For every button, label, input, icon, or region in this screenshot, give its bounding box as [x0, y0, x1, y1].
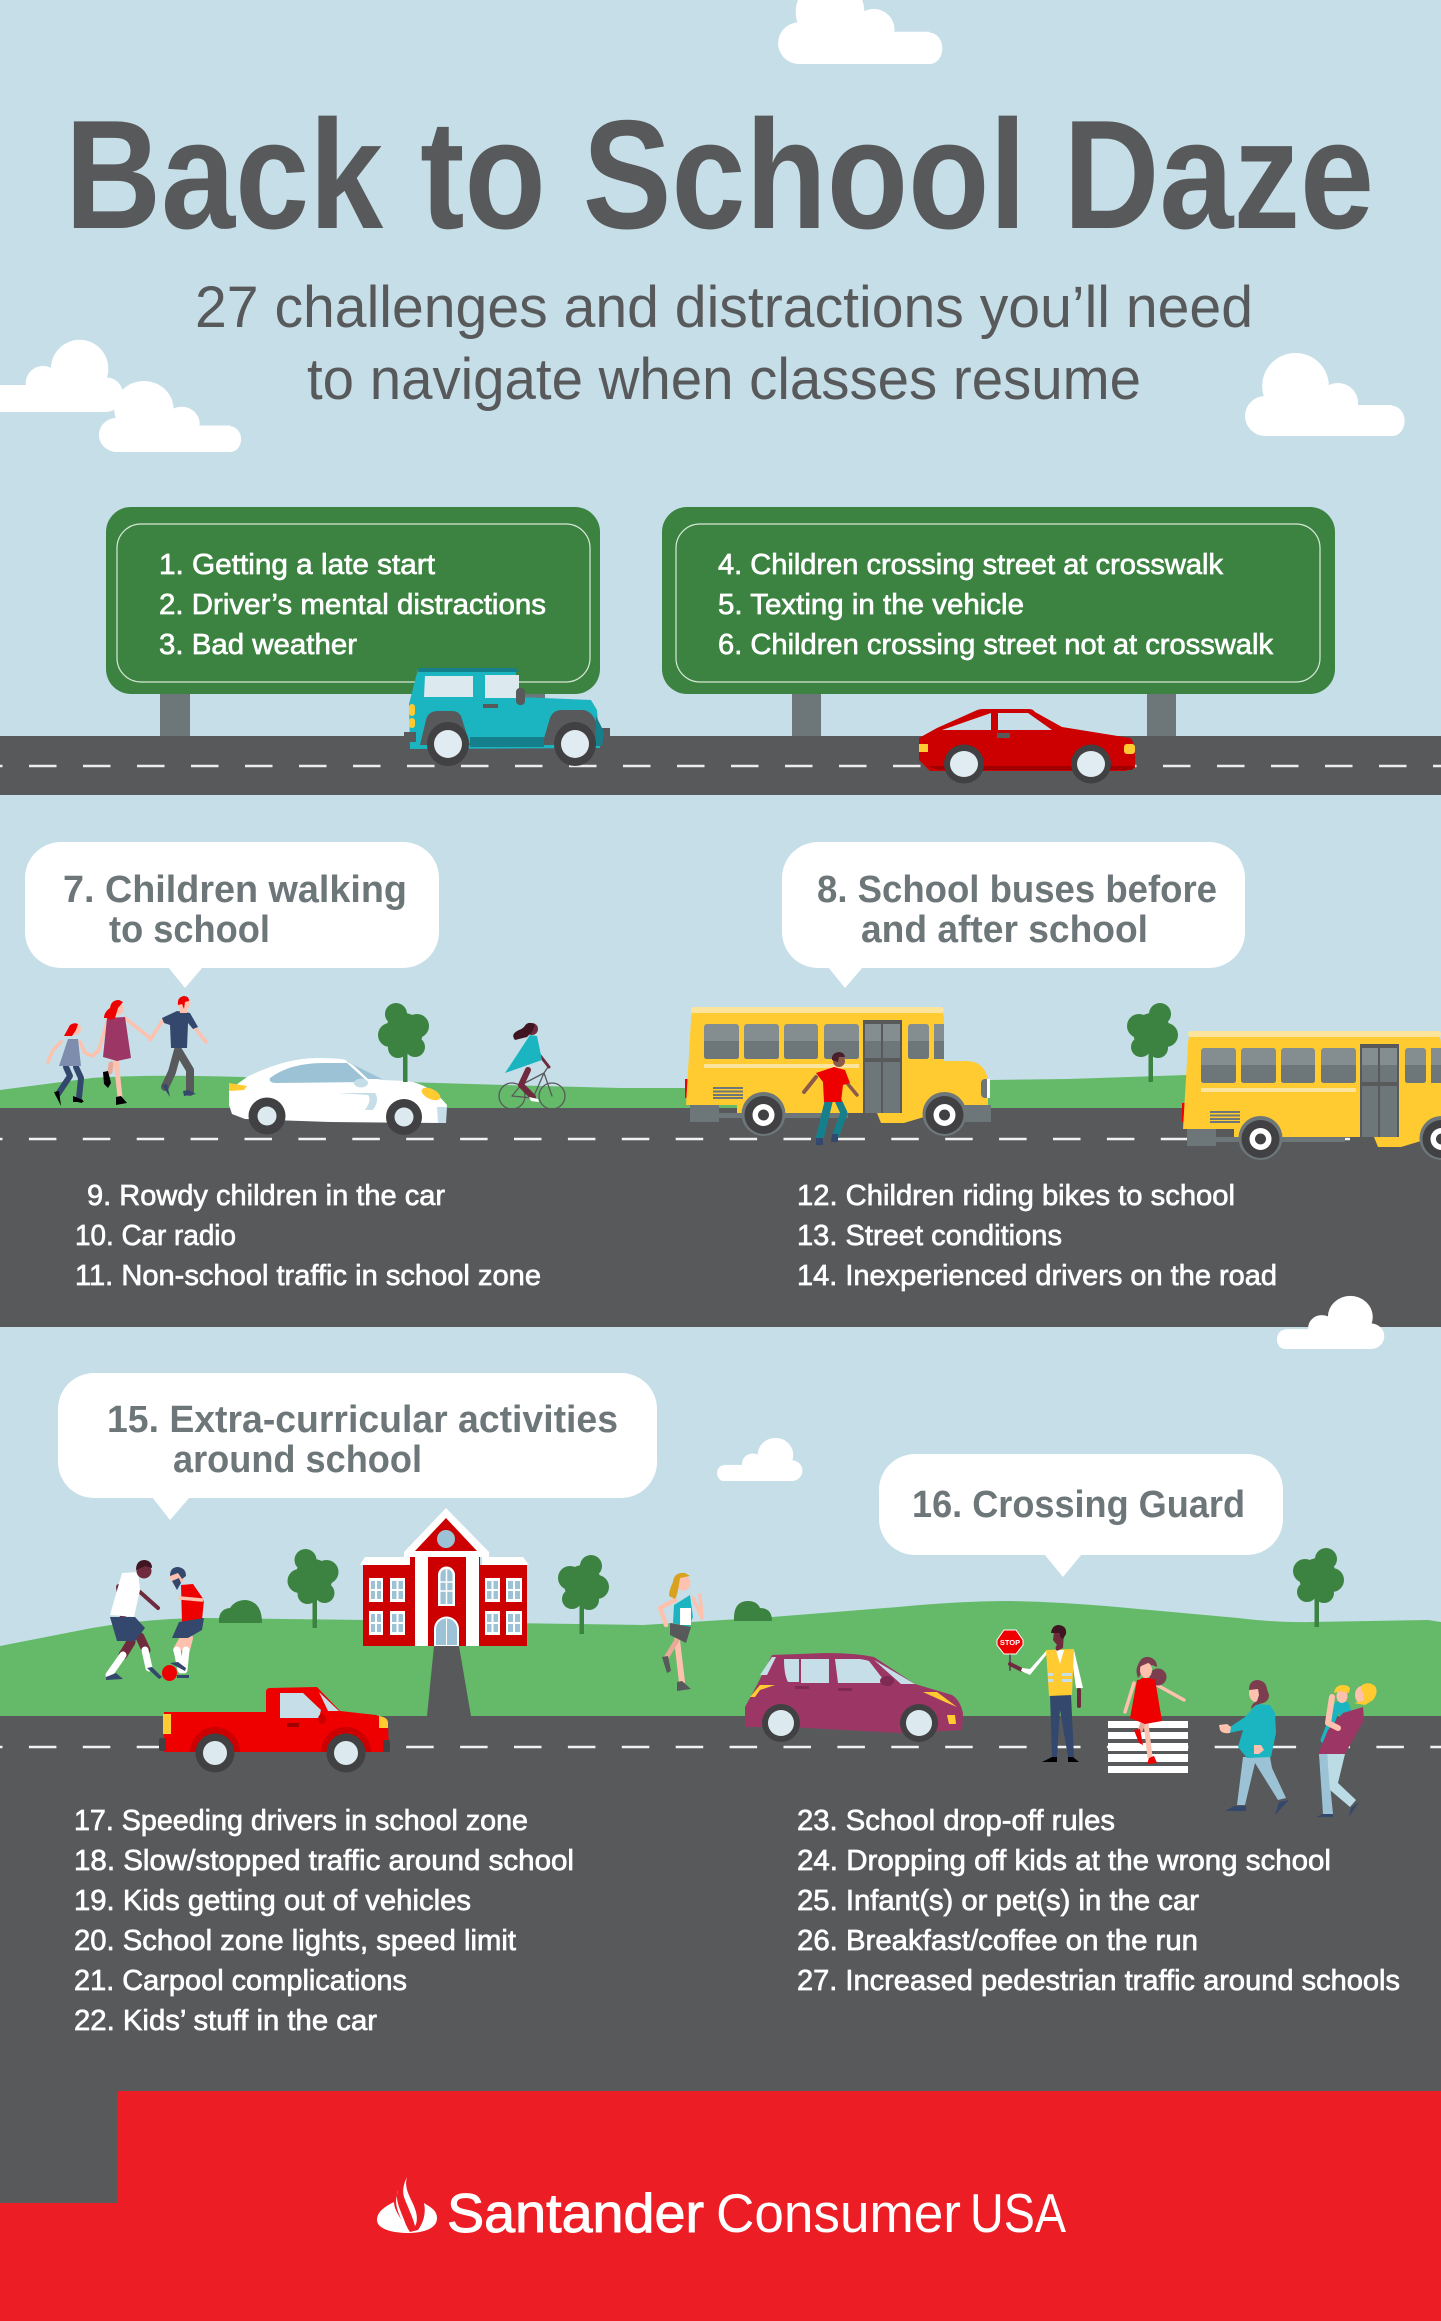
list: items 12-14: 14. Inexperienced drivers on the road	[797, 1260, 1277, 1292]
subtitle: 27 challenges and distractions you’ll need	[195, 275, 1253, 340]
list: items 23-27: 26. Breakfast/coffee on the run	[797, 1925, 1198, 1957]
sign 2 list	[718, 549, 1273, 661]
cloud: small centre	[717, 1438, 802, 1481]
soccer ball	[162, 1665, 177, 1681]
sign 1 list: 3. Bad weather	[159, 629, 357, 661]
tree	[558, 1555, 609, 1634]
panel: highway sign 2	[662, 507, 1335, 736]
speech bubble: item 8: and after school	[861, 909, 1148, 951]
school windows	[369, 1566, 522, 1635]
list: items 9-11: 9. Rowdy children in the car	[87, 1180, 445, 1212]
list: items 17-22: 21. Carpool complications	[74, 1965, 407, 1997]
grass hill: middle section	[0, 1075, 1441, 1108]
vehicle: red coupe	[919, 709, 1135, 784]
list: items 9-11: 10. Car radio	[75, 1220, 236, 1252]
speech bubble: item 7: to school	[109, 909, 270, 951]
person: girl on bicycle	[499, 1023, 565, 1109]
man	[150, 996, 206, 1097]
people: soccer players	[106, 1560, 204, 1681]
logo: Santander Consumer USA	[377, 2177, 1066, 2244]
cloud: mid right	[1277, 1296, 1384, 1349]
footer band	[0, 2091, 1441, 2321]
logo: Santander Consumer USA: Consumer	[716, 2182, 961, 2244]
list: items 23-27: 23. School drop-off rules	[797, 1805, 1115, 1837]
sign 1 list: 2. Driver’s mental distractions	[159, 589, 546, 621]
cloud: left upper	[0, 340, 123, 412]
child	[48, 1023, 100, 1106]
sign 1 list	[159, 549, 546, 661]
subtitle	[195, 275, 1253, 412]
list: items 23-27: 24. Dropping off kids at the wrong school	[797, 1845, 1331, 1877]
speech bubble: item 7	[25, 842, 439, 988]
person: man carrying child	[1316, 1683, 1377, 1817]
subtitle: to navigate when classes resume	[307, 347, 1141, 412]
list: items 9-11	[75, 1180, 541, 1292]
woman	[98, 1000, 150, 1105]
list: items 23-27	[797, 1805, 1400, 1997]
vehicle: red pickup truck	[159, 1687, 390, 1772]
speech bubble: item 8: 8. School buses before	[817, 869, 1217, 911]
list: items 17-22	[74, 1805, 574, 2037]
sign 1 list: 1. Getting a late start	[159, 549, 435, 581]
person: girl in red dress	[1125, 1657, 1184, 1764]
cloud: left lower	[99, 381, 241, 452]
list: items 9-11: 11. Non-school traffic in school zone	[75, 1260, 541, 1292]
road: top section	[0, 736, 1441, 795]
logo: Santander Consumer USA: Santander	[447, 2182, 704, 2244]
logo: Santander Consumer USA: USA	[970, 2182, 1066, 2244]
list: items 17-22: 22. Kids’ stuff in the car	[74, 2005, 377, 2037]
cloud: right	[1245, 353, 1405, 436]
bush	[734, 1601, 772, 1621]
list: items 17-22: 18. Slow/stopped traffic around school	[74, 1845, 574, 1877]
sign 2 list: 5. Texting in the vehicle	[718, 589, 1024, 621]
school driveway	[427, 1646, 471, 1716]
speech bubble: item 7: 7. Children walking	[63, 869, 407, 911]
vehicle: purple hatchback	[745, 1653, 963, 1742]
panel: highway sign 1	[106, 507, 600, 736]
list: items 17-22: 20. School zone lights, speed limit	[74, 1925, 516, 1957]
vehicle: school bus 2	[1182, 1031, 1441, 1160]
vehicle: teal jeep	[404, 668, 610, 766]
list: items 12-14: 12. Children riding bikes to school	[797, 1180, 1235, 1212]
speech bubble: item 8	[782, 842, 1245, 988]
grass hill: lower section	[0, 1601, 1441, 1716]
vehicle: white sports car	[229, 1058, 447, 1135]
speech bubble: item 16: 16. Crossing Guard	[912, 1484, 1245, 1526]
list: items 23-27: 27. Increased pedestrian traffic around schools	[797, 1965, 1400, 1997]
building: school	[360, 1508, 529, 1646]
sign 2 list: 4. Children crossing street at crosswalk	[718, 549, 1223, 581]
stop sign: STOP	[1000, 1638, 1020, 1647]
speech bubble: item 15: 15. Extra-curricular activities	[107, 1399, 618, 1441]
icon: flame	[377, 2177, 437, 2233]
school door	[434, 1616, 459, 1646]
road: middle section	[0, 1108, 1441, 1327]
tree	[1293, 1548, 1344, 1627]
speech bubble: item 16	[879, 1454, 1283, 1577]
sign 2 list: 6. Children crossing street not at crosswalk	[718, 629, 1273, 661]
list: items 23-27: 25. Infant(s) or pet(s) in the car	[797, 1885, 1199, 1917]
vehicle: school bus 1	[685, 1007, 991, 1136]
people: family walking	[48, 996, 206, 1106]
cloud: top centre	[778, 0, 942, 64]
tree	[288, 1549, 338, 1628]
speech bubble: item 15: around school	[173, 1439, 422, 1481]
person: crossing guard with stop sign	[997, 1625, 1083, 1762]
person: runner	[660, 1573, 702, 1691]
bush	[219, 1600, 262, 1623]
player 2	[170, 1567, 204, 1678]
list: items 12-14: 13. Street conditions	[797, 1220, 1062, 1252]
tree	[378, 1003, 429, 1082]
list: items 12-14	[797, 1180, 1277, 1292]
person: woman in teal sweater	[1219, 1680, 1289, 1815]
player 1	[106, 1560, 162, 1680]
road: lower section	[0, 1716, 1441, 2321]
list: items 17-22: 17. Speeding drivers in school zone	[74, 1805, 528, 1837]
person: boy in front of bus	[804, 1052, 857, 1145]
speech bubble: item 15	[58, 1373, 657, 1520]
tree	[1127, 1003, 1178, 1082]
crosswalk stripes	[1108, 1721, 1188, 1773]
list: items 17-22: 19. Kids getting out of vehicles	[74, 1885, 471, 1917]
